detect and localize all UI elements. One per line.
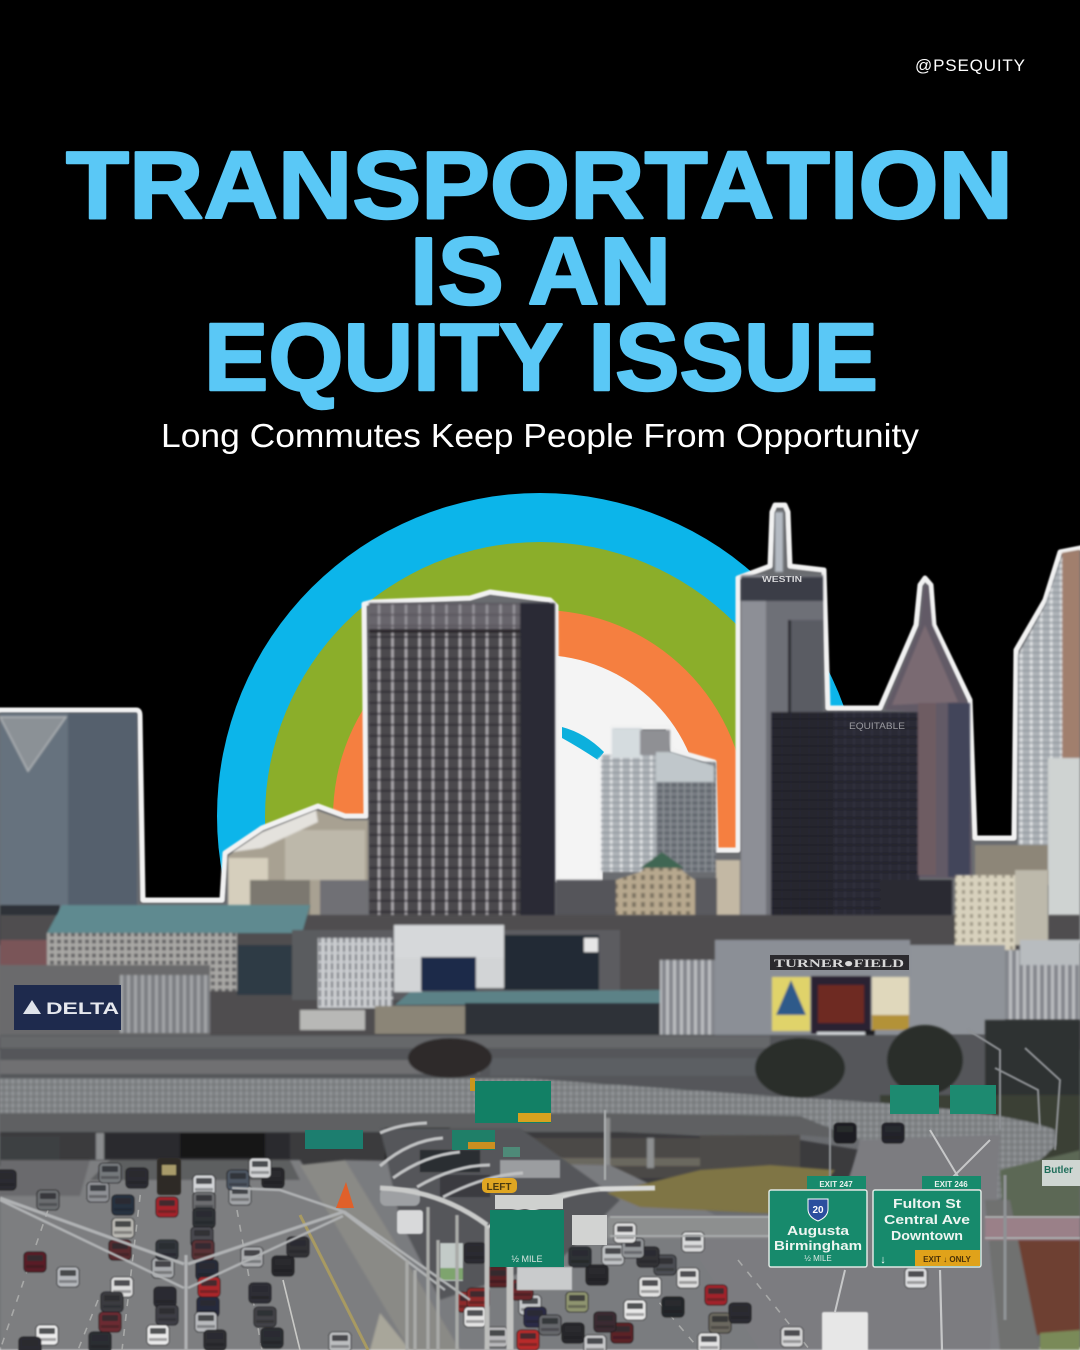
title: TRANSPORTATION: [66, 132, 1013, 239]
delta sign: DELTA: [46, 999, 119, 1018]
elevated ramp: [0, 1078, 1056, 1200]
sign: exit 246: Downtown: [891, 1228, 963, 1243]
turner field sign: TURNER●FIELD: [774, 956, 904, 970]
main dark tower: [369, 603, 555, 943]
midtown photo band: [0, 870, 1080, 1095]
sign: mid lower green: ½ MILE: [511, 1254, 543, 1264]
sign: distant right pair: [890, 1085, 996, 1114]
sign: mid distance: [305, 1130, 520, 1157]
skyline building labels: EQUITABLE: [849, 721, 905, 732]
cars: left carriageway: [0, 1158, 351, 1350]
stadium front buildings: [660, 940, 1080, 1040]
sign: exit 246: EXIT 246: [934, 1180, 968, 1189]
sign: upper ramp center: [470, 1078, 551, 1123]
handle text: @PSEQUITY: [915, 56, 1025, 75]
delta sign: [14, 985, 121, 1030]
sign: exit 247: [769, 1176, 867, 1267]
sign: exit 246: Central Ave: [884, 1212, 970, 1227]
traffic: [0, 1123, 927, 1350]
lane markings: [0, 1130, 990, 1350]
overhead green signs: [305, 1078, 1080, 1267]
sign: exit 247: EXIT 247: [819, 1180, 853, 1189]
skyline building labels: WESTIN: [762, 575, 802, 584]
sign: exit 246: [873, 1176, 981, 1267]
rainbow graphic: [217, 493, 863, 1139]
right towers: [975, 550, 1080, 943]
tan deco building: [556, 852, 740, 985]
street lights and gantry: [0, 1030, 1080, 1350]
pale mid tower: [601, 728, 716, 872]
subtitle: Long Commutes Keep People From Opportunity: [161, 417, 920, 454]
title: [66, 132, 1013, 411]
sign: exit 246: ↓: [880, 1254, 886, 1266]
left glass tower: [0, 713, 137, 945]
highway roads: [0, 1128, 1080, 1350]
sign: exit 247: Augusta: [787, 1223, 850, 1238]
cars: right carriageway: [380, 1123, 927, 1350]
low stepped building: [228, 810, 368, 930]
sign: exit 247: Birmingham: [774, 1238, 862, 1253]
sign: mid lower green: LEFT: [486, 1182, 512, 1193]
equitable building: [771, 712, 919, 942]
teal roof and brick block: [0, 965, 660, 1037]
billboards: [772, 976, 909, 1095]
title: IS AN: [410, 218, 671, 325]
skyline building labels: [762, 575, 905, 732]
sign: exit 246: Fulton St: [893, 1196, 962, 1211]
sign: mid lower green: [482, 1178, 607, 1267]
skyline cutout with white outline: [0, 505, 1080, 1350]
civic building with teal roof: [47, 905, 320, 1000]
turner field sign: [770, 955, 909, 970]
westin tower: [741, 512, 823, 945]
side sign right edge: [1042, 1160, 1080, 1186]
highway interchange band: [0, 1020, 1080, 1200]
side sign right edge: Butler: [1044, 1165, 1073, 1176]
median yellow line: [300, 1215, 368, 1350]
sign: exit 247: 20: [812, 1205, 824, 1216]
skyline buildings: [0, 512, 1080, 985]
sign: exit 246: EXIT ↓ ONLY: [923, 1255, 972, 1264]
title: EQUITY ISSUE: [204, 304, 878, 411]
orange cone: [336, 1182, 354, 1208]
pyramid tower: [885, 585, 972, 878]
sign: exit 247: ½ MILE: [804, 1254, 832, 1263]
white classical buildings: [318, 925, 599, 1008]
